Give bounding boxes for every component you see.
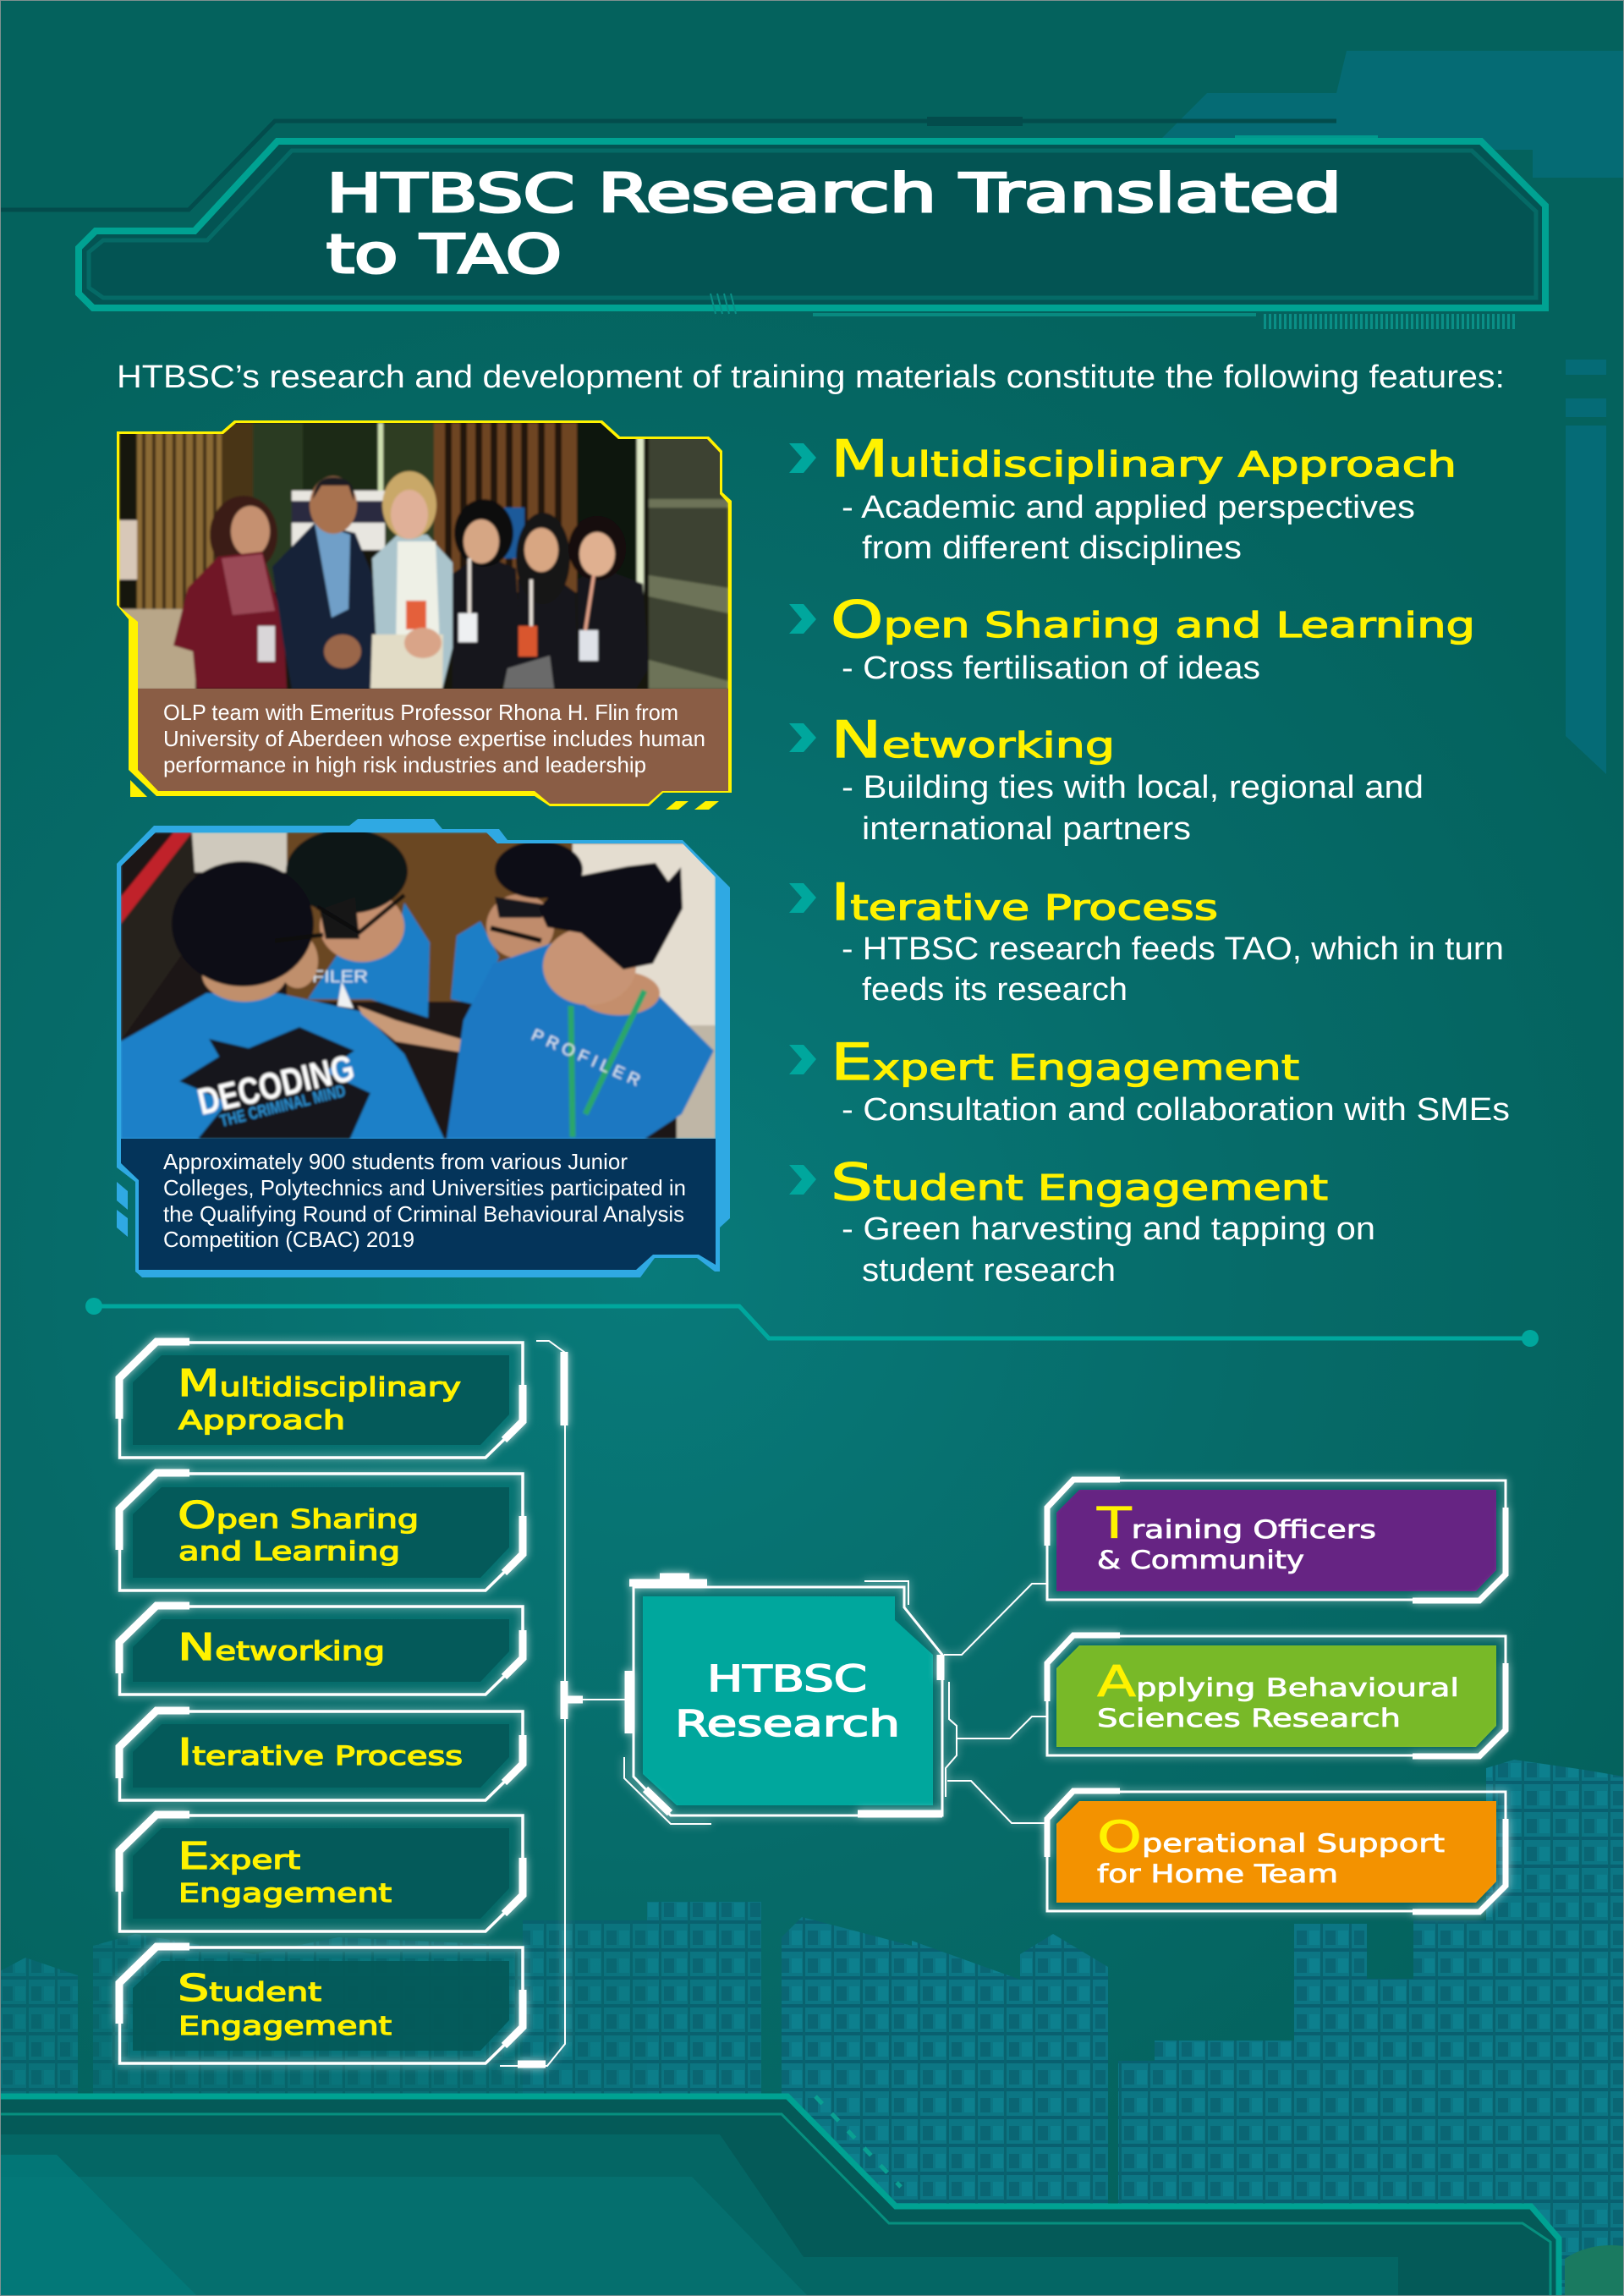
output box: Applying Behavioural Sciences Research: Sciences Research xyxy=(1097,1704,1401,1733)
output box: Applying Behavioural Sciences Research: A pplying Behavioural xyxy=(1097,1657,1459,1707)
feature: Iterative Process xyxy=(789,873,1504,1008)
person: student with lanyard xyxy=(337,863,714,1139)
input box: Open Sharing and Learning xyxy=(119,1473,523,1590)
input box: Student Engagement: S tudent xyxy=(178,1967,321,2010)
feature: Student Engagement: S tudent Engagement xyxy=(831,1153,1328,1212)
feature: Networking xyxy=(789,711,1424,847)
person: student back view: THE CRIMINAL MIND xyxy=(218,1082,348,1131)
output box: Operational Support for Home Team: O perational Support xyxy=(1097,1813,1445,1863)
centre box: HTBSC Research: HTBSC xyxy=(707,1658,867,1700)
person: woman in black jacket xyxy=(453,499,521,689)
person: student back view: DECODING xyxy=(194,1047,358,1123)
person: student back view xyxy=(121,861,444,1139)
photo: students discussing xyxy=(121,829,716,1139)
feature: Student Engagement: - Green harvesting and tapping on xyxy=(842,1211,1375,1247)
caption: OLP team xyxy=(138,689,728,804)
person: student with glasses centre: FILER xyxy=(312,968,368,986)
caption: students: the Qualifying Round of Criminal Behavioural Analysis xyxy=(163,1201,684,1227)
photo panel: students xyxy=(117,819,730,1277)
input box: Networking xyxy=(119,1606,523,1695)
title panel xyxy=(79,141,1545,308)
input box: Iterative Process xyxy=(119,1711,523,1800)
input box: Student Engagement xyxy=(119,1947,523,2063)
centre box: HTBSC Research xyxy=(624,1577,957,1824)
person: student with lanyard: PROFILER xyxy=(529,1025,643,1090)
person: woman with long hair xyxy=(503,513,579,689)
bottom panel xyxy=(0,2096,1559,2296)
caption: OLP team: University of Aberdeen whose expertise includes human xyxy=(163,726,705,751)
feature: Student Engagement xyxy=(789,1153,1375,1288)
feature: Multidisciplinary Approach: - Academic and applied perspectives xyxy=(842,490,1415,525)
photo panel: OLP team xyxy=(117,420,732,810)
person: student behind right xyxy=(451,841,583,1006)
city skyline xyxy=(0,1760,1624,2296)
top right background shape xyxy=(1150,51,1624,178)
connector lines xyxy=(944,1584,1047,1823)
input box: Multidisciplinary Approach: M ultidisciplinary xyxy=(178,1362,461,1405)
input box: Student Engagement: Engagement xyxy=(178,2012,392,2041)
decorative top lines xyxy=(0,121,1336,210)
feature: Networking: N etworking xyxy=(831,711,1115,770)
output box: Operational Support for Home Team: for Home Team xyxy=(1097,1859,1338,1888)
output box: Applying Behavioural Sciences Research xyxy=(1047,1635,1506,1756)
output box: Training Officers & Community: & Community xyxy=(1097,1546,1304,1574)
feature: Expert Engagement: E xpert Engagement xyxy=(831,1033,1299,1092)
intro text: HTBSC’s research and development of training materials constitute the following features: xyxy=(117,360,1505,395)
person: student with glasses centre xyxy=(286,829,430,1018)
bracket connector xyxy=(500,1341,626,2066)
feature: Iterative Process: feeds its research xyxy=(862,972,1127,1008)
section divider xyxy=(85,1298,1539,1347)
right side tabs xyxy=(1566,360,1606,774)
output box: Operational Support for Home Team xyxy=(1047,1791,1506,1912)
person: woman in maroon xyxy=(173,496,287,689)
input box: Open Sharing and Learning: and Learning xyxy=(178,1537,400,1567)
feature: Iterative Process: Iterative Process xyxy=(831,873,1218,932)
centre box: HTBSC Research: Research xyxy=(675,1703,900,1745)
output box: Training Officers & Community: T raining Officers xyxy=(1096,1499,1376,1549)
input box: Expert Engagement: E xpert xyxy=(178,1835,300,1878)
input box: Multidisciplinary Approach xyxy=(119,1342,523,1458)
feature: Expert Engagement: - Consultation and collaboration with SMEs xyxy=(842,1092,1510,1128)
title: HTBSC Research Translated xyxy=(326,162,1341,224)
input box: Multidisciplinary Approach: Approach xyxy=(178,1406,345,1436)
person: man in navy suit xyxy=(272,476,379,689)
output box: Training Officers & Community xyxy=(1047,1480,1506,1601)
feature: Open Sharing and Learning: O pen Sharing and Learning xyxy=(831,590,1475,650)
title second line: to TAO xyxy=(326,223,562,285)
feature: Multidisciplinary Approach: from different disciplines xyxy=(862,530,1242,566)
person: woman with blonde hair xyxy=(370,471,454,689)
input box: Expert Engagement xyxy=(119,1815,523,1931)
feature: Multidisciplinary Approach xyxy=(789,430,1457,566)
person: woman on right xyxy=(568,516,649,689)
feature: Expert Engagement xyxy=(789,1033,1510,1128)
caption: students: Colleges, Polytechnics and Universities participated in xyxy=(163,1175,686,1200)
feature: Multidisciplinary Approach: M ultidisciplinary Approach xyxy=(831,430,1457,489)
feature: Networking: - Building ties with local, regional and xyxy=(842,770,1424,805)
caption: students: Competition (CBAC) 2019 xyxy=(163,1227,414,1252)
caption: students: Approximately 900 students from various Junior xyxy=(163,1149,628,1174)
feature: Open Sharing and Learning xyxy=(789,590,1475,686)
caption: OLP team: OLP team with Emeritus Professor Rhona H. Flin from xyxy=(163,700,678,725)
feature: Iterative Process: - HTBSC research feeds TAO, which in turn xyxy=(842,931,1504,967)
photo: OLP team group xyxy=(119,420,728,694)
input box: Open Sharing and Learning: O pen Sharing xyxy=(178,1494,419,1537)
input box: Networking: N etworking xyxy=(178,1626,385,1669)
feature: Networking: international partners xyxy=(862,811,1191,847)
input box: Expert Engagement: Engagement xyxy=(178,1879,392,1909)
feature list xyxy=(789,430,1510,1288)
caption: OLP team: performance in high risk industries and leadership xyxy=(163,752,646,777)
input box: Iterative Process: Iterative Process xyxy=(178,1731,463,1774)
caption: students xyxy=(121,1139,716,1270)
feature: Open Sharing and Learning: - Cross fertilisation of ideas xyxy=(842,651,1260,686)
feature: Student Engagement: student research xyxy=(862,1253,1116,1288)
